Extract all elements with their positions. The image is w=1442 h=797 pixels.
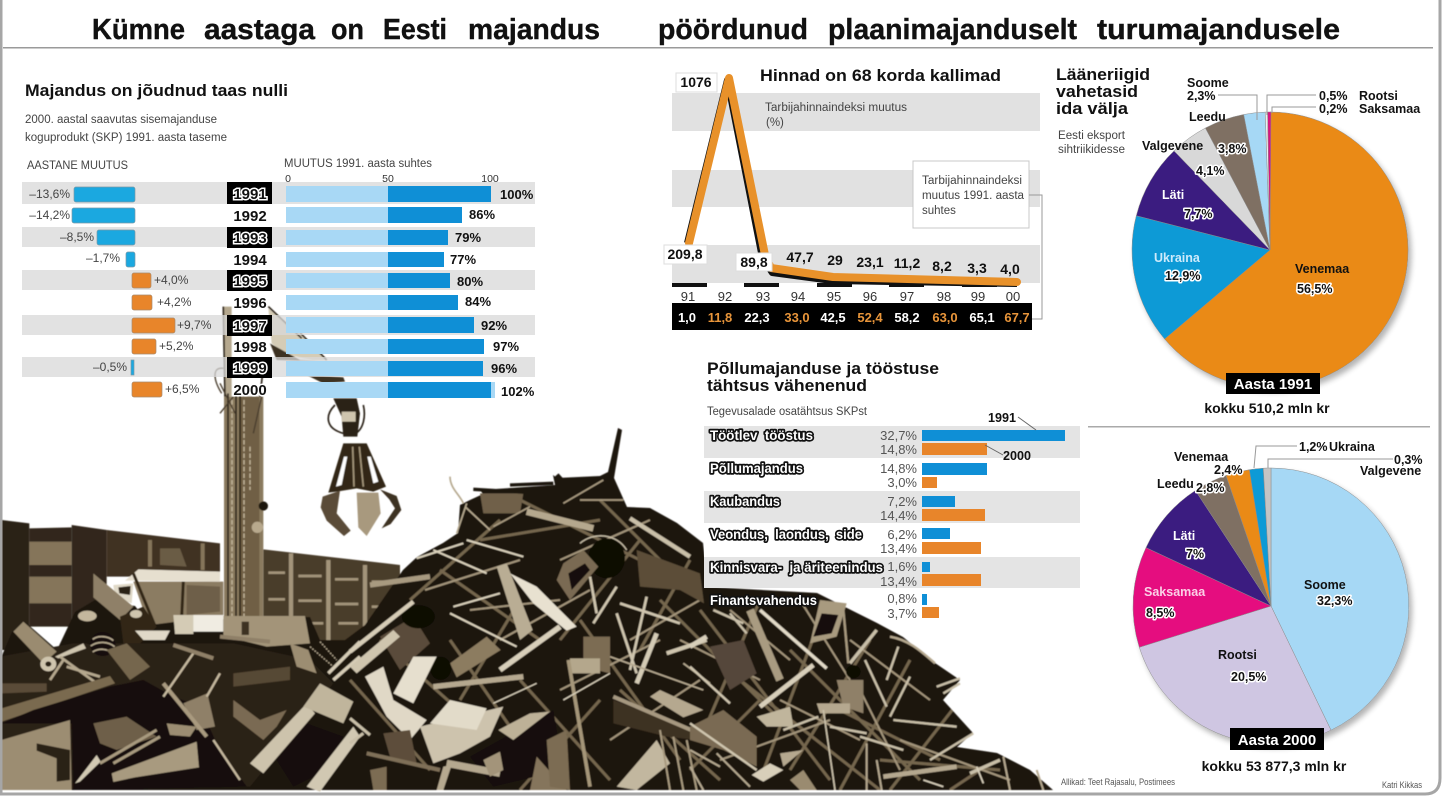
divider — [1088, 426, 1430, 428]
photo: rail wagons — [2, 520, 400, 650]
pie labels 1991: 2,3% — [1187, 89, 1216, 103]
data labels: 209,8 — [667, 246, 703, 262]
x axis years: 99 — [971, 289, 985, 304]
pie labels 2000: Rootsi — [1218, 648, 1257, 662]
pie labels 2000: 0,3% — [1394, 453, 1422, 467]
pie labels 1991: Ukraina — [1154, 251, 1201, 265]
text: exports caption — [1058, 130, 1126, 156]
data labels: 3,3 — [967, 260, 987, 276]
bar chart: change relative to 1991: 97% — [493, 339, 519, 354]
photo: foreground scrap, right section — [690, 600, 1043, 790]
sector labels — [710, 428, 883, 608]
sector values: 14,4% — [880, 508, 917, 523]
x axis years: 93 — [756, 289, 770, 304]
photo: foreground scrap, left section — [0, 573, 360, 792]
data labels: 89,8 — [740, 254, 768, 270]
value strip: index relative to 1991: 67,7 — [1004, 310, 1030, 325]
value strip: index relative to 1991: 58,2 — [894, 310, 920, 325]
data labels: 47,7 — [786, 249, 814, 265]
year labels: 1992 — [233, 208, 267, 225]
white backing behind sector table — [704, 420, 1080, 587]
pie labels 1991: Rootsi — [1359, 89, 1398, 103]
panel: export destinations — [1056, 65, 1430, 774]
text: GDP description: 2000. aastal saavutas sisemajanduse — [25, 114, 217, 126]
year labels: 1993 — [233, 230, 267, 247]
line chart: price index change — [687, 78, 1017, 284]
bar chart: change relative to 1991: 100% — [500, 187, 534, 202]
value strip: index relative to 1991: 42,5 — [820, 310, 846, 325]
pie labels 1991: 3,8% — [1218, 142, 1246, 156]
title: pöördunud — [658, 14, 808, 46]
title: plaanimajanduselt — [828, 14, 1077, 46]
text: chart caption — [765, 102, 907, 129]
bar chart: change relative to 1991: 79% — [455, 230, 481, 245]
title: on — [331, 14, 364, 46]
year box 2000: Aasta 2000 — [1238, 732, 1316, 749]
pie labels 1991: Läti — [1162, 188, 1184, 202]
value strip: index relative to 1991: 22,3 — [744, 310, 770, 325]
bar chart: annual change: +4,2% — [157, 295, 192, 309]
year labels: 1996 — [233, 295, 267, 312]
photo: crane mast — [215, 307, 268, 640]
sector values: 7,2% — [887, 494, 917, 509]
source credit: Allikad: Teet Rajasalu, Postimees — [1061, 777, 1175, 787]
data labels: 1076 — [680, 74, 712, 90]
sector values: 13,4% — [880, 574, 917, 589]
text: chart caption: Tarbijahinnaindeksi muutus — [765, 102, 907, 114]
bar chart: annual change: –13,6% — [29, 187, 70, 201]
bar chart: change relative to 1991: 84% — [465, 294, 491, 309]
bar chart: annual change: –14,2% — [29, 208, 70, 222]
value strip: index relative to 1991 — [672, 303, 1032, 330]
bar chart: change relative to 1991: 77% — [450, 252, 476, 267]
sector values: 1,6% — [887, 559, 917, 574]
pie labels 1991: Soome — [1187, 76, 1229, 90]
title: Kümne — [92, 14, 185, 46]
sector values: 14,8% — [880, 461, 917, 476]
data labels: 8,2 — [932, 258, 952, 274]
callout: index relative to 1991: suhtes — [922, 205, 956, 217]
year labels: 1995 — [233, 273, 267, 290]
bar chart: change relative to 1991: 102% — [501, 384, 535, 399]
bar chart: annual change: +6,5% — [165, 382, 200, 396]
sector labels: Veondus, laondus, side — [710, 527, 862, 542]
value strip: index relative to 1991: 33,0 — [784, 310, 810, 325]
year labels: 1994 — [233, 252, 267, 269]
sector labels: Põllumajandus — [710, 461, 803, 476]
x axis years — [681, 289, 1020, 304]
photo: pile mid-tone struts — [350, 500, 1000, 790]
x axis years: 98 — [937, 289, 951, 304]
pie labels 2000: Ukraina — [1329, 440, 1376, 454]
panel: GDP change — [22, 81, 535, 399]
pie labels 2000: 8,5% — [1146, 606, 1174, 620]
pie labels 1991: 12,9% — [1165, 269, 1200, 283]
title: majandus — [468, 14, 600, 46]
bar chart: annual change: –0,5% — [93, 360, 127, 374]
bar chart: annual change: +9,7% — [177, 318, 212, 332]
text: GDP description — [25, 114, 227, 144]
pie labels 2000: Läti — [1173, 529, 1195, 543]
panel: sectors share of GDP — [704, 359, 1080, 621]
sector labels: Kaubandus — [710, 494, 780, 509]
year labels — [227, 182, 272, 399]
pie labels 2000: 2,4% — [1214, 463, 1242, 477]
pie labels 2000: 1,2% — [1299, 440, 1328, 454]
year tick marks — [672, 283, 997, 287]
callout: index relative to 1991: muutus 1991. aasta — [922, 190, 1025, 202]
heading: sectors: Põllumajanduse ja tööstuse — [707, 359, 939, 378]
pie labels 2000: Saksamaa — [1144, 585, 1206, 599]
axis labels — [285, 173, 499, 185]
year labels: 1991 — [233, 186, 267, 203]
pie labels 1991 — [1142, 76, 1421, 296]
sector labels: Finantsvahendus — [710, 593, 817, 608]
legend: 1991: 1991 — [988, 410, 1016, 425]
legend: 1991 — [988, 410, 1036, 430]
pie labels 1991: 0,2% — [1319, 102, 1348, 116]
bar chart: annual change: +5,2% — [159, 339, 194, 353]
heading: sectors — [707, 359, 939, 395]
photo: grapple — [321, 398, 401, 536]
sector labels: Kinnisvara- ja äriteenindus — [710, 560, 883, 575]
heading: prices: Hinnad on 68 korda kallimad — [760, 66, 1001, 85]
x axis years: 95 — [827, 289, 841, 304]
bar chart: annual change — [29, 187, 212, 397]
legend: 2000 — [985, 445, 1031, 463]
author credit: Katri Kikkas — [1382, 780, 1422, 790]
callout: index relative to 1991: Tarbijahinnaindeksi — [922, 175, 1022, 187]
text: exports caption: sihtriikidesse — [1058, 144, 1125, 156]
photo: scrap yard with crane — [0, 307, 1060, 795]
heading: sectors: tähtsus vähenenud — [707, 376, 867, 395]
text: chart caption: (%) — [766, 117, 784, 129]
pie labels 2000 — [1144, 440, 1422, 684]
text: sectors caption: Tegevusalade osatähtsus SKPst — [707, 406, 868, 418]
pie labels 1991: 0,5% — [1319, 89, 1348, 103]
data labels: 4,0 — [1000, 261, 1020, 277]
pie labels 2000: Venemaa — [1174, 450, 1229, 464]
leader lines 1991 — [1218, 95, 1316, 120]
pie labels 1991: Valgevene — [1142, 139, 1203, 153]
x axis years: 00 — [1006, 289, 1020, 304]
data labels: 11,2 — [894, 255, 920, 271]
pie labels 1991: Venemaa — [1295, 262, 1350, 276]
value strip: index relative to 1991: 65,1 — [969, 310, 995, 325]
row bands — [704, 426, 1080, 588]
bar chart: change relative to 1991 — [286, 186, 535, 399]
column header: annual change: AASTANE MUUTUS — [27, 160, 128, 172]
sector values: 14,8% — [880, 442, 917, 457]
pie labels 2000: 20,5% — [1231, 670, 1266, 684]
pie labels 2000: Soome — [1304, 578, 1346, 592]
heading: GDP: Majandus on jõudnud taas nulli — [25, 81, 288, 100]
heading: exports — [1056, 65, 1150, 118]
sector values — [880, 428, 917, 621]
text: GDP description: koguprodukt (SKP) 1991. aasta taseme — [25, 132, 227, 144]
title: turumajandusele — [1097, 14, 1340, 46]
value strip: index relative to 1991: 11,8 — [708, 310, 732, 325]
bar chart: change relative to 1991: 86% — [469, 207, 495, 222]
x axis years: 91 — [681, 289, 695, 304]
legend: 2000: 2000 — [1003, 448, 1031, 463]
x axis years: 96 — [863, 289, 877, 304]
year box 1991 — [1226, 373, 1320, 394]
axis labels: 50 — [382, 173, 394, 185]
sector values: 3,0% — [887, 475, 917, 490]
bar chart: sector shares — [922, 430, 1065, 618]
pie chart: 1991 — [1132, 76, 1421, 416]
photo: crane arm — [268, 307, 345, 383]
year labels: 2000 — [233, 382, 267, 399]
pie labels 1991: 56,5% — [1297, 282, 1332, 296]
bar chart: annual change: –1,7% — [86, 251, 120, 265]
total 1991: kokku 510,2 mln kr — [1204, 400, 1330, 416]
sector values: 6,2% — [887, 527, 917, 542]
year labels: 1998 — [233, 339, 267, 356]
pie labels 2000: 32,3% — [1317, 594, 1352, 608]
pie chart: 2000 — [1133, 440, 1422, 774]
year box 2000 — [1230, 728, 1324, 750]
sector values: 0,8% — [887, 591, 917, 606]
text: exports caption: Eesti eksport — [1058, 130, 1126, 142]
pie labels 2000: Valgevene — [1360, 464, 1421, 478]
photo: scrap pile — [0, 420, 1060, 795]
value strip: index relative to 1991: 1,0 — [678, 310, 696, 325]
year labels: 1997 — [233, 318, 267, 335]
photo: foreground scrap, centre section — [350, 475, 710, 790]
leader lines 2000 — [1254, 446, 1393, 468]
sector labels: Töötlev tööstus — [710, 428, 813, 443]
sector values: 13,4% — [880, 541, 917, 556]
value strip: index relative to 1991: 63,0 — [932, 310, 958, 325]
data labels — [664, 73, 1020, 277]
bar chart: annual change: +4,0% — [154, 273, 189, 287]
axis labels: 100 — [481, 173, 499, 185]
x axis years: 94 — [791, 289, 805, 304]
pie labels 1991: Leedu — [1189, 110, 1226, 124]
pie labels 1991: 4,1% — [1196, 164, 1224, 178]
title: aastaga — [204, 14, 316, 46]
data labels: 23,1 — [856, 254, 884, 270]
value strip: index relative to 1991: 52,4 — [857, 310, 883, 325]
x axis years: 92 — [718, 289, 732, 304]
sector values: 3,7% — [887, 606, 917, 621]
data labels: 29 — [827, 252, 843, 268]
year labels: 1999 — [233, 360, 267, 377]
bar chart: change relative to 1991: 92% — [481, 318, 507, 333]
title: Eesti — [383, 14, 447, 46]
title rule — [3, 47, 1433, 48]
total 2000: kokku 53 877,3 mln kr — [1202, 758, 1347, 774]
heading: exports: vahetasid — [1056, 82, 1138, 101]
chart background bands — [672, 93, 1040, 283]
pie labels 2000: Leedu — [1157, 477, 1194, 491]
bar chart: change relative to 1991: 80% — [457, 274, 483, 289]
year box 1991: Aasta 1991 — [1234, 376, 1312, 393]
pie labels 2000: 2,8% — [1196, 481, 1224, 495]
title — [92, 14, 1340, 46]
sector values: 32,7% — [880, 428, 917, 443]
panel: consumer prices — [664, 66, 1042, 330]
heading: exports: ida välja — [1056, 99, 1129, 118]
heading: exports: Lääneriigid — [1056, 65, 1150, 84]
x axis years: 97 — [900, 289, 914, 304]
pie labels 1991: Saksamaa — [1359, 102, 1421, 116]
callout: index relative to 1991 — [913, 161, 1042, 319]
column header: change vs 1991: MUUTUS 1991. aasta suhtes — [284, 158, 432, 170]
bar chart: change relative to 1991: 96% — [491, 361, 517, 376]
row stripes — [22, 182, 535, 377]
photo: truck cab — [113, 569, 223, 630]
pie labels 2000: 7% — [1186, 547, 1204, 561]
axis labels: 0 — [285, 173, 291, 185]
pie labels 1991: 7,7% — [1184, 207, 1212, 221]
bar chart: annual change: –8,5% — [60, 230, 94, 244]
